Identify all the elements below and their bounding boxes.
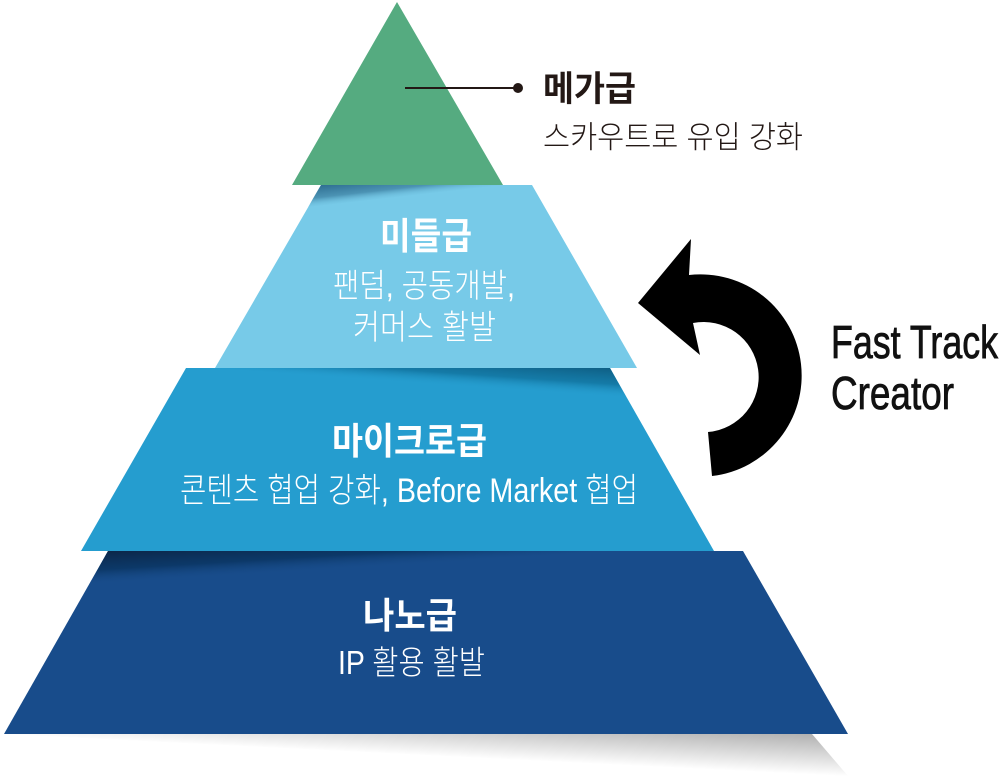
icon: curved return arrow bbox=[638, 239, 802, 476]
tier: 마이크로급 bbox=[81, 368, 714, 551]
heading: 나노급: 나노급 bbox=[363, 595, 457, 636]
tier: 나노급 bbox=[4, 551, 848, 734]
leader line bbox=[405, 83, 523, 93]
heading: 마이크로급: 마이크로급 bbox=[332, 421, 487, 462]
text: IP 활용 활발: IP 활용 활발 bbox=[338, 644, 485, 681]
text: 스카우트로 유입 강화: 스카우트로 유입 강화 bbox=[543, 120, 803, 155]
text: 커머스 활발: 커머스 활발 bbox=[353, 309, 496, 347]
text: 콘텐츠 협업 강화: 콘텐츠 협업 강화, Before Market 협업 bbox=[180, 472, 638, 510]
heading: 미들급: 미들급 bbox=[380, 216, 472, 257]
tier: 메가급 bbox=[292, 2, 503, 185]
floor shadow bbox=[4, 734, 848, 776]
tier: 미들급 bbox=[215, 185, 637, 368]
text: 팬덤, 공동개발,: 팬덤, 공동개발, bbox=[333, 267, 515, 304]
heading: 메가급: 메가급 bbox=[543, 70, 636, 109]
label: Fast Track Creator: Creator bbox=[831, 367, 954, 419]
label: 메가급 bbox=[543, 70, 803, 155]
label: Fast Track Creator bbox=[831, 316, 999, 419]
